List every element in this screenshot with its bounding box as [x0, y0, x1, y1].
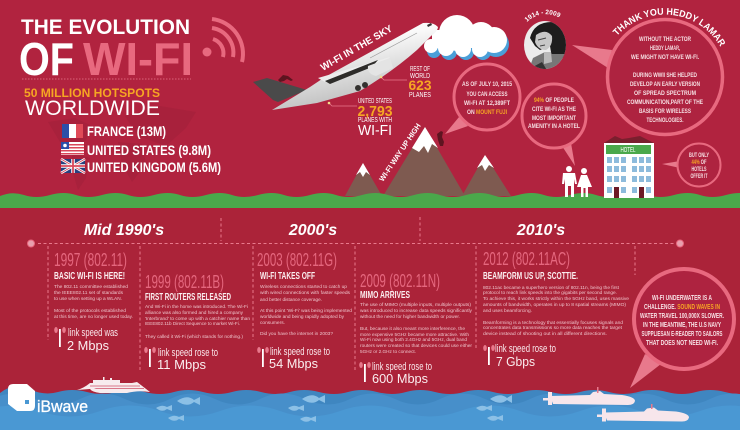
ship	[77, 377, 150, 393]
timeline entry: 1999: 11 Mbps	[157, 357, 206, 372]
fish group left	[156, 397, 200, 421]
bubble: wi-fi underwater: WI-FI UNDERWATER IS A	[652, 293, 712, 302]
flag: France	[62, 124, 83, 138]
plane tail fin	[253, 78, 307, 102]
timeline entry: 2003: At this point 'Wi-Fi' was being implemented	[260, 308, 352, 314]
France label: FRANCE (13M)	[87, 123, 166, 139]
bubble: hotels offering wi-fi: BUT ONLY	[689, 153, 709, 159]
icon: antenna	[54, 327, 66, 347]
mountain center	[383, 127, 465, 196]
callout: united states planes: WI-FI	[358, 122, 392, 139]
bubble: mount fuji	[445, 64, 520, 134]
bubble: hotel amenity: AMENITY IN A HOTEL	[528, 123, 580, 130]
background: lower section	[0, 208, 740, 430]
bubble: hotel amenity: 94% OF PEOPLE	[534, 97, 574, 104]
timeline entry: 1997: The 802.11 committee established	[54, 284, 128, 290]
callout: rest of world planes	[380, 66, 432, 99]
timeline entry: 1997: at this time, are no longer used today.	[54, 314, 133, 320]
decade heading: 2010s: 2010's	[516, 222, 565, 239]
worldwide label: WORLDWIDE	[25, 97, 160, 120]
timeline entry: 2012: To achieve this, it works strictly within the 5GHz band, uses massive	[483, 296, 629, 302]
cloud	[424, 15, 509, 60]
icon: antenna	[257, 347, 269, 367]
heading: wi-fi way up high: WI-FI WAY UP HIGH	[377, 122, 423, 183]
background: upper section	[0, 0, 740, 210]
timeline entry: 1999: 'Interbrand' to come up with a catchier name than	[145, 316, 250, 322]
United States label: UNITED STATES (9.8M)	[87, 142, 211, 158]
timeline entry: 2003: link speed rose to	[270, 346, 330, 358]
cloud body	[424, 15, 507, 57]
mountain right	[462, 155, 511, 196]
timeline entry: 2003: 2003 (802.11G)	[257, 250, 337, 270]
bubble: hotel amenity: MOST IMPORTANT	[532, 115, 577, 122]
title word: WI-FI: WI-FI	[83, 33, 193, 85]
timeline entry: 1999: IEEE802.11b Direct Sequence to market Wi-Fi.	[145, 321, 240, 327]
bubble: Heddy Lamar: HEDDY LAMAR,	[650, 45, 680, 52]
decade heading: 2000s: 2000's	[288, 222, 337, 239]
timeline entry: 2012: 7 Gbps	[496, 354, 535, 369]
decade heading: mid 1990s: Mid 1990's	[84, 222, 164, 239]
logo: iBwave	[8, 384, 88, 416]
bubble: Heddy Lamar: BASIS FOR WIRELESS	[639, 108, 691, 115]
decade dividers	[48, 217, 635, 372]
timeline entry: 2012	[483, 249, 629, 369]
timeline entry: 2003: 54 Mbps	[269, 356, 318, 371]
fish group center	[288, 395, 325, 422]
callout: united states planes: UNITED STATES	[358, 98, 392, 105]
timeline entry: 2012: device instead of shooting out in all different directions.	[483, 331, 607, 337]
bubble: hotels offering wi-fi: 44% OF	[692, 160, 707, 166]
timeline entry: 2012: protocol to reach link speeds into the gigabits per second range.	[483, 290, 617, 296]
hotspot country list	[61, 123, 221, 175]
fish group right	[476, 395, 512, 421]
timeline entry: 2012: 802.11ac became a superhero version of 802.11n, being the first	[483, 285, 620, 291]
callout: united states planes: 2,793	[358, 103, 392, 120]
bubble: hotel amenity	[522, 84, 586, 166]
timeline entry: 2003: Did you have the internet in 2003?	[260, 331, 333, 337]
timeline entry: 1999: alliance was also formed and hired a company	[145, 310, 244, 316]
timeline entry: 2009	[359, 271, 473, 386]
timeline entry: 1997	[54, 250, 133, 353]
portrait: Heddy Lamar	[524, 21, 566, 69]
portrait dates: 1914 - 2009	[524, 10, 560, 22]
hotspots heading	[24, 86, 160, 120]
timeline start node	[28, 240, 34, 247]
world map silhouette	[48, 106, 196, 190]
title	[19, 16, 193, 85]
water: ocean waves	[0, 386, 740, 430]
bubble: Heddy Lamar: DEVELOP AN EARLY VERSION	[630, 81, 700, 88]
timeline entry: 1999: And Wi-Fi in the home was introduced. The Wi-Fi	[145, 304, 248, 310]
flag: United States	[61, 142, 84, 155]
timeline entry: 2003: and better distance coverage.	[260, 297, 322, 303]
cockpit window	[427, 23, 432, 27]
bubble: wi-fi underwater	[630, 269, 734, 388]
bubble: mount fuji: YOU CAN ACCESS	[466, 91, 508, 98]
timeline entry: 2009: Wi-Fi now using both 2.4GHz and 5GHz, dual band	[360, 337, 467, 343]
submarine upper	[543, 387, 635, 405]
bubble: wi-fi underwater: CHALLENGE. SOUND WAVES IN	[644, 302, 720, 311]
callout: united states planes	[328, 98, 392, 139]
mountain left	[345, 163, 382, 196]
timeline entry: 2003	[257, 250, 352, 371]
bubble: mount fuji: WI-FI AT 12,389FT	[464, 100, 511, 107]
United Kingdom label: UNITED KINGDOM (5.6M)	[87, 159, 221, 175]
landing gear	[355, 82, 368, 91]
plane engine	[368, 58, 393, 76]
hotel building: HOTEL	[620, 147, 636, 154]
timeline entry: 1999: FIRST ROUTERS RELEASED	[145, 292, 231, 303]
timeline entry: 2012: concentrates data transmissions so more data reaches the target	[483, 325, 623, 331]
timeline entry: 2012: 2012 (802.11AC)	[483, 249, 570, 269]
plane wing	[318, 57, 390, 82]
timeline entry: 2012: link speed rose to	[495, 343, 556, 355]
title line 1: THE EVOLUTION	[21, 16, 190, 39]
ground: green grass band	[0, 193, 740, 208]
hotel roof	[604, 136, 654, 143]
submarine lower	[597, 404, 689, 422]
timeline entry: 1999: They called it Wi-Fi (which stands for nothing.)	[145, 334, 243, 340]
hotel doors	[614, 187, 644, 198]
bubble: hotels offering wi-fi: OFFER IT	[690, 174, 708, 180]
bubble: Heddy Lamar: WITHOUT THE ACTOR	[639, 36, 691, 43]
timeline entry: 2009: 600 Mbps	[372, 371, 428, 386]
icon: antenna	[359, 362, 371, 382]
timeline entry: 2009: was introduced to increase data speeds significantly	[360, 308, 473, 314]
callout: united states planes: PLANES WITH	[358, 117, 392, 124]
callout: rest of world planes: PLANES	[409, 92, 431, 99]
timeline entry: 1997: link speed was	[68, 327, 118, 339]
heading: thank you heddy lamar: THANK YOU HEDDY LAMAR	[612, 8, 725, 47]
bubble: Heddy Lamar: OF SPREAD SPECTRUM	[634, 90, 696, 97]
timeline entry: 2012: amounts of bandwidth, operates in up to 8 spatial streams (MIMO)	[483, 302, 626, 308]
timeline entry: 2003: Wireless connections started to catch up	[260, 284, 347, 290]
timeline entry: 1997: 1997 (802.11)	[54, 250, 127, 270]
wing shadow	[325, 60, 378, 84]
icon: couple	[562, 166, 592, 197]
timeline entry: 2009: routers were created so that devices could use either	[360, 343, 472, 349]
callout: rest of world planes: WORLD	[410, 73, 430, 80]
icon: antenna	[483, 345, 495, 365]
bubble: hotel amenity: CITE WI-FI AS THE	[532, 106, 576, 113]
title divider	[22, 78, 191, 80]
fuselage window line	[370, 33, 417, 58]
timeline entry: 1997: Most of the protocols established	[54, 308, 126, 314]
timeline entry: 2009: more expensive 5GHz became more attractive. With	[360, 332, 469, 338]
logo mark	[8, 384, 35, 411]
timeline entry: 2009: link speed rose to	[372, 361, 432, 373]
bubble: hotels offering wi-fi	[662, 144, 720, 186]
bubble: Heddy Lamar: TECHNOLOGIES.	[646, 117, 684, 124]
icon: climber on plane tail	[278, 75, 293, 82]
timeline entry: 2009: But, because it also meant more interference, the	[360, 326, 465, 332]
timeline entry: 2012: BEAMFORM US UP, SCOTTIE.	[483, 271, 578, 282]
bubble: Heddy Lamar: DURING WWII SHE HELPED	[633, 72, 697, 79]
bubble: hotels offering wi-fi: HOTELS	[692, 167, 706, 173]
icon: climber on mountain	[437, 131, 444, 146]
timeline entry: 1997: the IEEE802.11 set of standards	[54, 290, 124, 296]
bubble: mount fuji: AS OF JULY 10, 2015	[462, 81, 512, 88]
timeline entry: 1999: link speed rose to	[158, 347, 218, 359]
timeline entry: 1999	[144, 272, 250, 372]
callout: rest of world planes: 623	[408, 77, 432, 93]
timeline entry: 2012: and uses beamforcing.	[483, 308, 532, 314]
title word: OF: OF	[19, 33, 74, 85]
icon: antenna	[144, 347, 156, 367]
timeline entry: 2003: WI-FI TAKES OFF	[260, 271, 315, 282]
hotel building	[604, 136, 654, 198]
logo wordmark: iBwave	[37, 397, 88, 416]
hotel windows	[607, 157, 651, 193]
timeline entry: 1997: to use when setting up a WLAN.	[54, 296, 122, 302]
timeline entry: 2003: consumers.	[260, 320, 285, 326]
bubble: Heddy Lamar	[572, 20, 722, 134]
bubble: mount fuji: ON MOUNT FUJI	[467, 109, 507, 116]
timeline entry: 2012: Beamforming is a technology that essentially focuses signals and	[483, 320, 623, 326]
timeline entry: 2009: 2009 (802.11N)	[360, 271, 440, 291]
bubble: Heddy Lamar: WE MIGHT NOT HAVE WI-FI.	[631, 54, 699, 61]
timeline entry: 2009: 5GHz or 2.GHz to connect.	[360, 349, 416, 355]
timeline entry: 1997: BASIC WI-FI IS HERE!	[54, 271, 125, 282]
timeline dashed line	[38, 242, 675, 244]
mountains	[345, 127, 511, 196]
bubble: Heddy Lamar: COMMUNICATION,PART OF THE	[627, 99, 703, 106]
hotel facade	[604, 143, 654, 198]
cloud shadow	[427, 31, 509, 60]
timeline entry: 2009: The use of MIMO (multiple inputs, multiple outputs)	[360, 302, 471, 308]
flag: United Kingdom	[61, 159, 85, 173]
timeline entry: 2003: with wired connections with faster speeds	[260, 290, 351, 296]
icon: wifi signal	[202, 19, 243, 62]
plane fuselage	[272, 23, 438, 110]
callout: rest of world planes: REST OF	[410, 66, 430, 73]
timeline entry: 1999: 1999 (802.11B)	[145, 272, 224, 292]
timeline end node	[676, 240, 684, 247]
timeline entry: 2009: MIMO ARRIVES	[360, 290, 410, 301]
timeline entry: 2009: without the need for higher bandwidth or power.	[360, 314, 460, 320]
timeline entry: 2003: worldwide and being rapidly adopted by	[260, 314, 345, 320]
hotspots count: 50 MILLION HOTSPOTS	[24, 86, 160, 100]
heading: wi-fi in the sky: WI-FI IN THE SKY	[319, 23, 395, 74]
timeline entry: 1997: 2 Mbps	[67, 338, 109, 353]
hotel sign	[606, 145, 651, 154]
airplane	[253, 23, 438, 110]
